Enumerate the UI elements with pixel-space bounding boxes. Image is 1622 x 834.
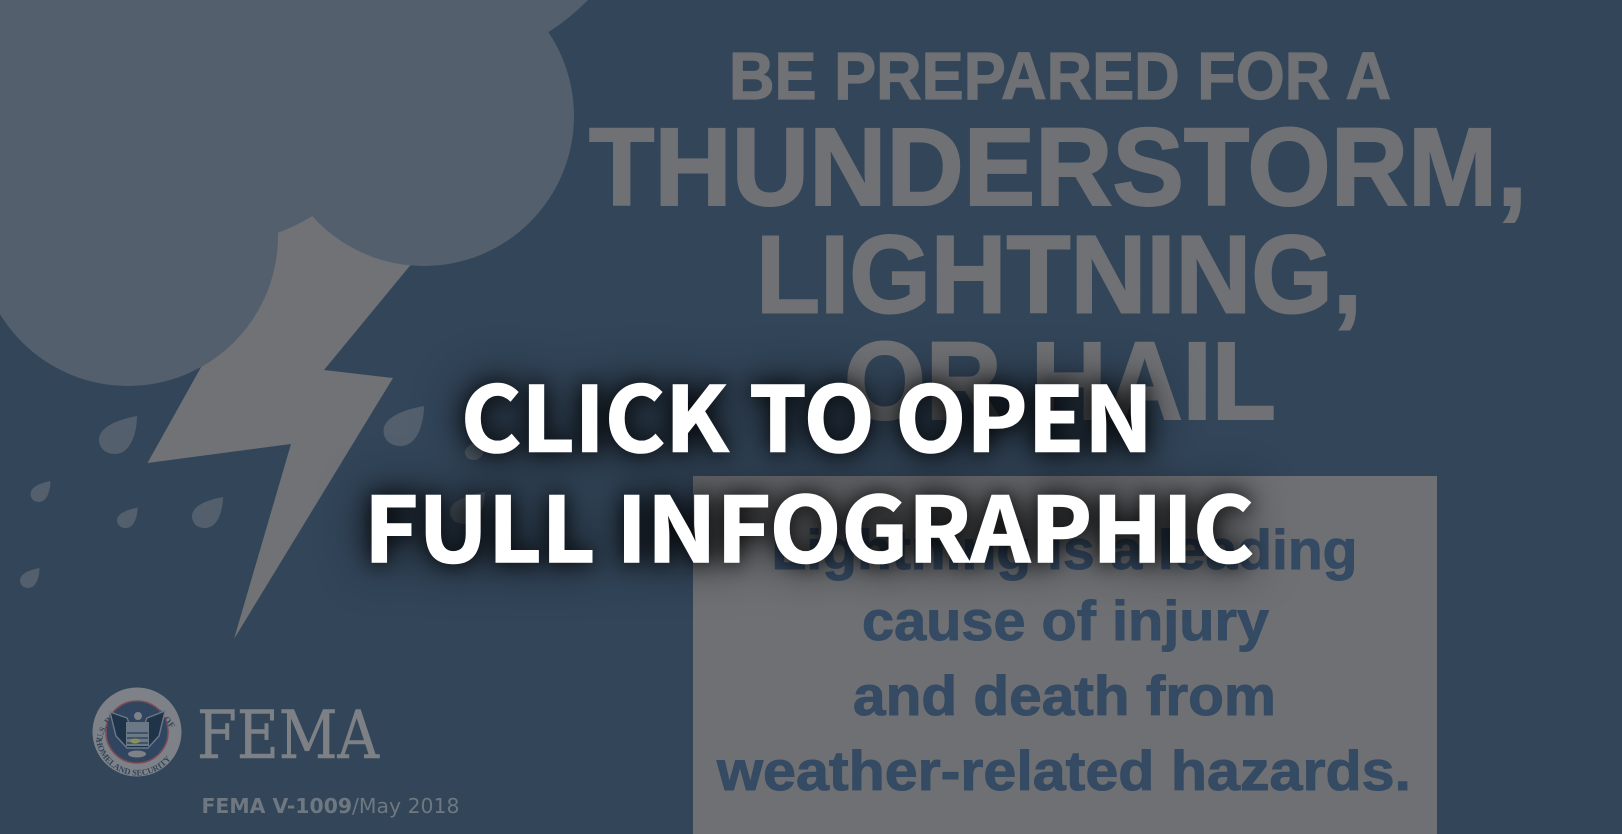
logo: FEMA wordmark: FEMA — [197, 697, 380, 774]
icon: storm cloud — [0, 0, 655, 386]
heading: be prepared for a thunderstorm, lightning, or hail: BE PREPARED FOR A — [729, 40, 1391, 114]
text block: lightning fact: Lightning is a leading — [772, 518, 1358, 581]
text block: lightning fact — [716, 518, 1411, 802]
overlay: click to open call to action: CLICK TO OPEN — [461, 348, 1153, 478]
icon: DHS seal: HOMELAND SECURITY — [96, 740, 170, 776]
overlay: click to open call to action: FULL INFOGRAPHIC — [364, 458, 1254, 588]
heading: be prepared for a thunderstorm, lightning, or hail: THUNDERSTORM, — [589, 106, 1527, 229]
icon: DHS seal — [92, 688, 182, 776]
text block: lightning fact: weather-related hazards. — [716, 739, 1411, 802]
panel: lightning fact box — [693, 476, 1437, 834]
icon: DHS seal: U.S. DEPARTMENT OF — [96, 706, 175, 740]
heading: be prepared for a thunderstorm, lightning, or hail: LIGHTNING, — [756, 214, 1362, 336]
icon: lightning bolt — [148, 190, 460, 639]
text: publication number: FEMA V-1009/May 2018 — [202, 794, 460, 818]
icon: rain drops — [20, 406, 486, 588]
overlay: click to open call to action — [364, 348, 1254, 588]
heading: be prepared for a thunderstorm, lightning, or hail: OR HAIL — [844, 320, 1276, 443]
heading: be prepared for a thunderstorm, lightning, or hail — [589, 40, 1527, 443]
text block: lightning fact: and death from — [853, 664, 1276, 727]
text block: lightning fact: cause of injury — [862, 589, 1269, 652]
